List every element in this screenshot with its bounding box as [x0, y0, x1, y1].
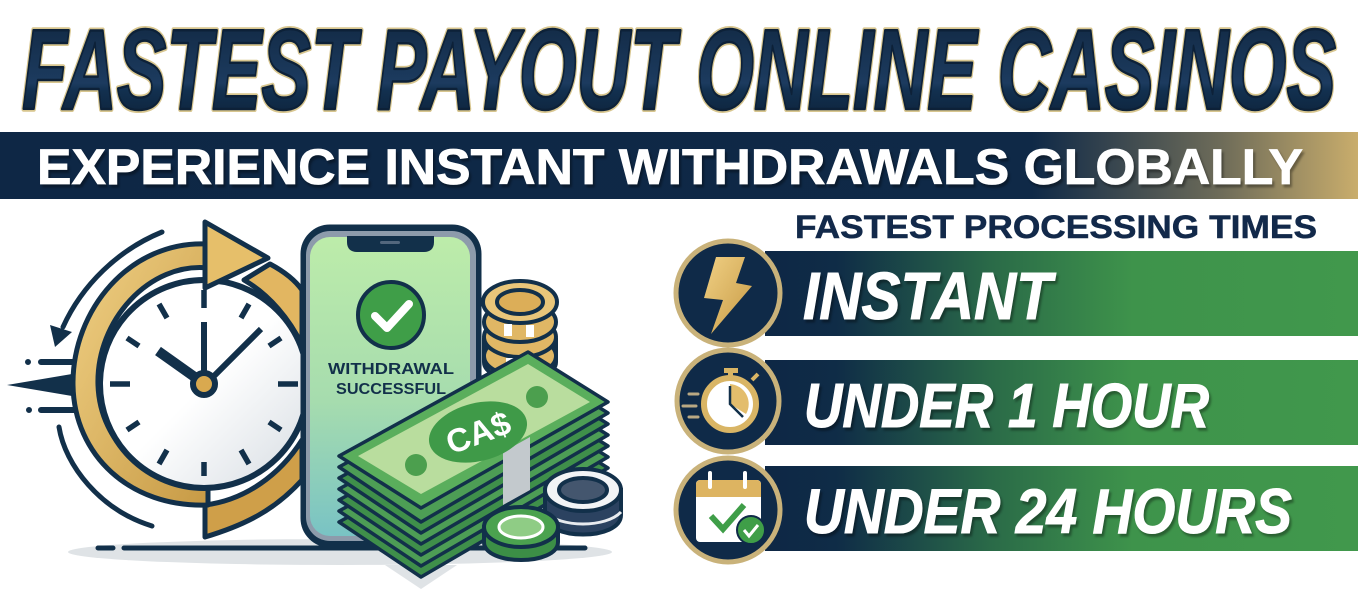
icon: lightning bolt — [676, 241, 780, 345]
speed lines — [7, 232, 162, 526]
phone — [302, 226, 480, 546]
CA$ badge: CA$ — [441, 404, 516, 461]
tier: instant: INSTANT — [803, 259, 1056, 334]
navy chips — [545, 469, 621, 534]
tier: under 1 hour — [677, 350, 1358, 452]
success check — [358, 282, 424, 348]
clock face — [100, 222, 308, 488]
withdrawal message — [328, 361, 454, 398]
CA$ badge — [422, 392, 534, 472]
tier: instant — [676, 241, 1358, 345]
withdrawal message: WITHDRAWAL — [328, 361, 454, 378]
tier: under 24 hours — [676, 458, 1358, 562]
withdrawal message: SUCCESSFUL — [336, 381, 446, 398]
heading: processing times: FASTEST PROCESSING TIMES — [795, 209, 1317, 245]
tier: under 24 hours: UNDER 24 HOURS — [804, 477, 1292, 547]
cash stack — [339, 352, 608, 577]
subtitle banner: EXPERIENCE INSTANT WITHDRAWALS GLOBALLY — [37, 139, 1303, 195]
ground shadow — [68, 539, 612, 589]
icon: stopwatch — [677, 350, 779, 452]
tier: under 1 hour: UNDER 1 HOUR — [804, 372, 1209, 441]
green chip — [484, 507, 558, 560]
gold circular arrows — [73, 244, 302, 537]
illustration: clock, phone, cash and chips — [7, 222, 621, 589]
gold chips — [483, 281, 557, 379]
icon: calendar — [676, 458, 780, 562]
